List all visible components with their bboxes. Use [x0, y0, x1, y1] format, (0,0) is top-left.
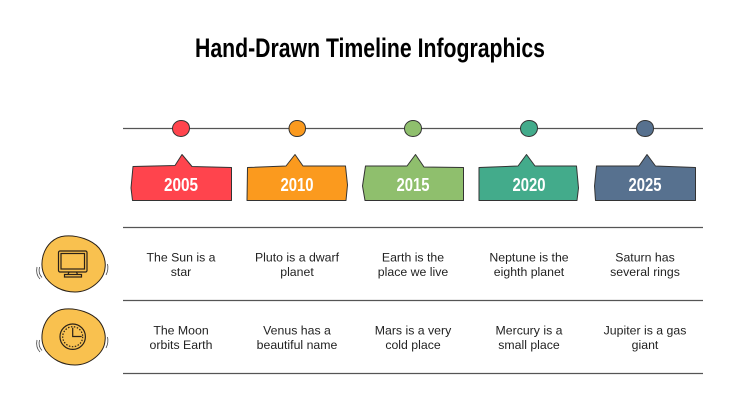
row 2 text: The Moon	[153, 324, 209, 338]
row 1 text: Neptune is the	[489, 250, 569, 264]
row 1 text: Saturn has	[615, 250, 675, 264]
timeline dot: 2020	[520, 120, 538, 136]
row 1 text: Earth is the	[382, 250, 444, 264]
icon: monitor badge	[37, 236, 108, 292]
row 1 text: Pluto is a dwarf	[255, 250, 340, 264]
row 2 text: orbits Earth	[150, 338, 213, 352]
row 1 text: star	[171, 265, 191, 279]
row 2 text: Jupiter is a gas	[604, 324, 686, 338]
row 1 text: The Sun is a	[146, 250, 216, 264]
year tag: 2015	[362, 154, 464, 200]
icon: clock badge	[37, 309, 108, 365]
year tag: 2025: 2025	[628, 175, 662, 195]
row 2 text	[150, 324, 686, 352]
year tag: 2020: 2020	[512, 175, 546, 195]
timeline line	[123, 128, 703, 130]
row 2 text: Mercury is a	[496, 324, 563, 338]
row 1 text: several rings	[610, 265, 680, 279]
timeline dot: 2015	[404, 120, 422, 136]
year tag: 2020	[479, 154, 578, 200]
year tag: 2015: 2015	[396, 175, 430, 195]
year tag: 2010: 2010	[280, 175, 314, 195]
year tag: 2025	[594, 154, 696, 200]
row 1 text	[146, 250, 680, 279]
row 2 text: Venus has a	[263, 324, 331, 338]
timeline dot: 2005	[172, 120, 190, 136]
row 1 text: eighth planet	[494, 265, 565, 279]
row 2 text: giant	[632, 338, 659, 352]
title: Hand-Drawn Timeline Infographics	[195, 33, 545, 63]
row 1 text: planet	[280, 265, 314, 279]
row 2 text: beautiful name	[257, 338, 337, 352]
row 2 text: small place	[498, 338, 560, 352]
table rules	[123, 228, 703, 374]
timeline dot: 2010	[289, 120, 306, 136]
row 1 text: place we live	[378, 265, 448, 279]
row 2 text: Mars is a very	[375, 324, 452, 338]
year tag: 2005: 2005	[164, 175, 198, 195]
timeline dot: 2025	[636, 120, 654, 136]
row 2 text: cold place	[385, 338, 441, 352]
year tag: 2005	[131, 154, 232, 200]
year tag: 2010	[247, 154, 348, 200]
